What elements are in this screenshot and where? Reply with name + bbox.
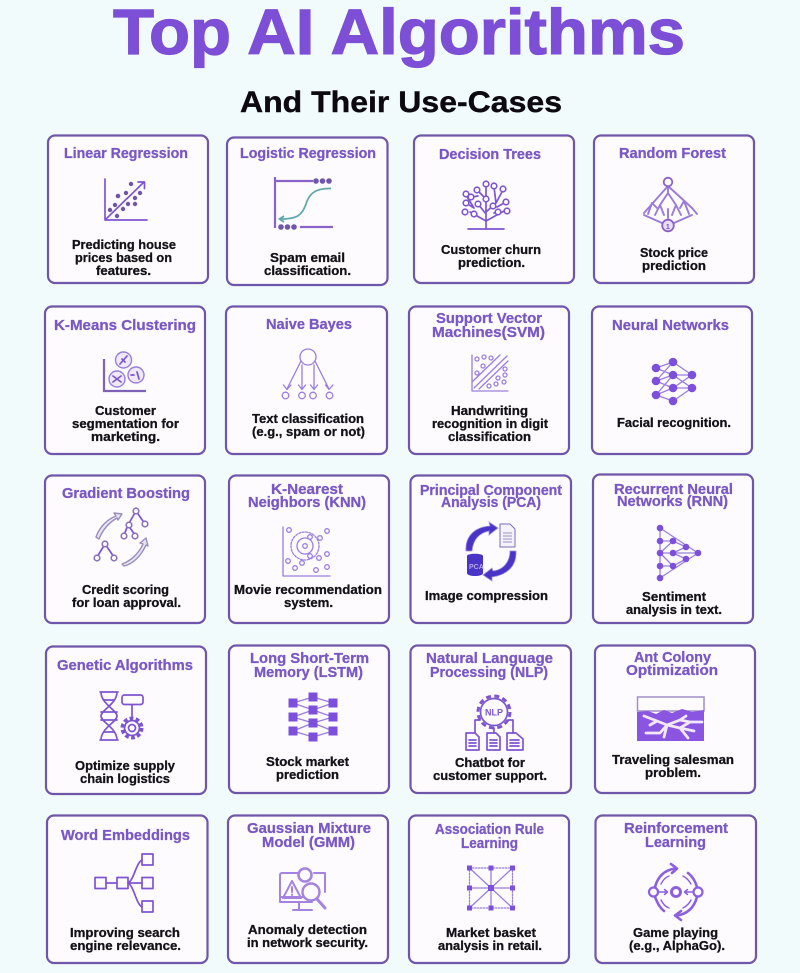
use case text: Optimize supply [75, 758, 176, 773]
use case text: segmentation for [72, 416, 179, 431]
panel: Decision Trees [414, 136, 574, 283]
panel: Naive Bayes [226, 306, 387, 454]
use case text: system. [284, 595, 333, 610]
use case text: in network security. [247, 935, 368, 950]
icon: PCA cycle with database and document [466, 522, 516, 581]
panel: Recurrent Neural Networks [593, 474, 753, 623]
use case text: Sentiment [642, 589, 707, 604]
icon: word embedding tree [95, 854, 153, 912]
use case text: (e.g., spam or not) [252, 424, 365, 439]
heading: Ant Colony Optimization: Ant Colony [634, 649, 712, 666]
icon: sigmoid curve [275, 177, 333, 230]
icon: recurrent neural network [657, 525, 701, 581]
heading: K-Nearest Neighbors (KNN): Neighbors (KNN) [248, 494, 366, 511]
use case text: Image compression [425, 588, 548, 603]
heading: Random Forest: Random Forest [619, 145, 726, 162]
heading: K-Nearest Neighbors (KNN) [248, 481, 366, 511]
use case text [640, 245, 708, 273]
heading: Support Vector Machines(SVM) [432, 310, 545, 341]
use case text [70, 925, 181, 953]
heading: Logistic Regression: Logistic Regression [240, 145, 376, 162]
use case text: Stock price [640, 245, 708, 260]
icon: NLP gear and documents [466, 696, 523, 750]
use case text [252, 411, 365, 439]
heading: Gaussian Mixture Model (GMM) [247, 820, 371, 851]
heading: Neural Networks: Neural Networks [612, 317, 729, 334]
use case text: Chatbot for [455, 755, 525, 770]
use case text [432, 403, 549, 444]
icon: boosting trees and arrows [94, 508, 148, 566]
use case text: engine relevance. [70, 938, 181, 953]
heading: Reinforcement Learning: Reinforcement [624, 820, 728, 837]
use case text: prediction [276, 767, 339, 782]
panel: Genetic Algorithms [46, 646, 206, 794]
icon: random forest [644, 178, 697, 231]
heading: Genetic Algorithms: Genetic Algorithms [57, 657, 193, 674]
use case text: (e.g., AlphaGo). [629, 938, 725, 953]
use case text [438, 925, 542, 953]
use case text: Customer [95, 403, 156, 418]
icon: ant colony tunnels [637, 697, 704, 741]
use case text [72, 403, 179, 444]
heading: Long Short-Term Memory (LSTM): Long Short-Term [250, 650, 369, 667]
use case text: prediction. [458, 255, 525, 270]
heading: Decision Trees: Decision Trees [439, 146, 541, 163]
icon: monitor with warning and magnifier [280, 868, 325, 910]
subtitle: And Their Use-Cases [240, 86, 562, 119]
use case text: problem. [645, 765, 701, 780]
panel: Logistic Regression [227, 138, 388, 285]
use case text: prices based on [75, 250, 172, 265]
heading: Support Vector Machines(SVM): Support Vector [436, 310, 542, 327]
use case text [75, 758, 176, 786]
icon: reinforcement cycle [649, 864, 702, 920]
icon: SVM scatter with separating hyperplane [472, 355, 508, 391]
use case text: Predicting house [72, 237, 176, 252]
icon: NLP gear and documents: NLP [485, 708, 503, 718]
heading: Recurrent Neural Networks (RNN): Networks (RNN) [617, 493, 728, 510]
use case text: recognition in digit [432, 416, 549, 431]
heading: Ant Colony Optimization: Optimization [626, 662, 718, 679]
heading: Long Short-Term Memory (LSTM) [250, 650, 369, 681]
panel: Reinforcement Learning [596, 816, 756, 963]
heading: K-Nearest Neighbors (KNN): K-Nearest [271, 481, 343, 498]
use case text: classification. [264, 263, 351, 278]
use case text: Spam email [270, 250, 345, 265]
panel: Principal Component Analysis [410, 476, 571, 623]
use case text [234, 582, 382, 610]
icon: decision tree [462, 181, 510, 229]
icon: random forest: 1 [666, 222, 670, 231]
use case text: Customer churn [441, 242, 541, 257]
use case text: Traveling salesman [612, 752, 734, 767]
use case text: classification [448, 429, 531, 444]
panel: Support Vector Machines [409, 306, 569, 454]
heading: Natural Language Processing (NLP) [426, 650, 553, 681]
use case text: Anomaly detection [248, 922, 367, 937]
use case text [626, 589, 722, 617]
icon: scatter plot with trend line [105, 179, 147, 220]
icon: DNA helix and gear [100, 692, 143, 740]
use case text: Game playing [633, 925, 718, 940]
use case text: Movie recommendation [234, 582, 382, 597]
use case text: Credit scoring [82, 582, 169, 597]
use case text [264, 250, 351, 278]
use case text [433, 755, 547, 783]
use case text: Market basket [446, 925, 537, 940]
use case text [441, 242, 541, 270]
heading: Association Rule Learning: Association Rule [435, 821, 544, 838]
use case text: Stock market [266, 754, 350, 769]
heading: Linear Regression: Linear Regression [64, 145, 188, 162]
use case text [612, 752, 734, 780]
use case text: Improving search [70, 925, 180, 940]
heading: Gaussian Mixture Model (GMM): Model (GMM) [262, 834, 355, 851]
panel: Gradient Boosting [45, 476, 205, 623]
heading: Recurrent Neural Networks (RNN): Recurrent Neural [614, 481, 733, 498]
use case text: marketing. [91, 429, 160, 444]
heading: Reinforcement Learning [624, 820, 728, 851]
icon: neural network [652, 358, 696, 405]
heading: Long Short-Term Memory (LSTM): Memory (LSTM) [254, 664, 363, 681]
heading: Word Embeddings: Word Embeddings [61, 827, 190, 844]
panel: Gaussian Mixture Model [228, 816, 388, 963]
heading: Recurrent Neural Networks (RNN) [614, 481, 733, 510]
panel: Ant Colony Optimization [595, 646, 755, 793]
heading: Gradient Boosting: Gradient Boosting [62, 485, 190, 502]
heading: Ant Colony Optimization [626, 649, 718, 679]
heading: Naive Bayes: Naive Bayes [266, 316, 352, 333]
heading: Support Vector Machines(SVM): Machines(SVM) [432, 324, 545, 341]
heading: Reinforcement Learning: Learning [645, 834, 706, 851]
use case text: analysis in text. [626, 602, 722, 617]
icon: association grid [467, 866, 515, 910]
panel: Long Short-Term Memory [229, 646, 389, 793]
icon: LSTM network of squares [288, 692, 338, 742]
icon: nearest neighbours plot [283, 527, 330, 576]
heading: Principal Component Analysis (PCA): Analysis (PCA) [441, 494, 541, 511]
use case text: customer support. [433, 768, 547, 783]
panel: Linear Regression [48, 136, 208, 283]
use case text [266, 754, 350, 782]
panel: Natural Language Processing [410, 646, 571, 793]
icon: PCA cycle with database and document: PCA [469, 564, 484, 571]
use case text: features. [96, 263, 151, 278]
icon: clusters [104, 352, 146, 391]
use case text: Handwriting [451, 403, 528, 418]
use case text: Text classification [252, 411, 364, 426]
use case text [72, 582, 181, 610]
use case text [72, 237, 176, 278]
heading: Gaussian Mixture Model (GMM): Gaussian Mixture [247, 820, 371, 837]
panel: K-Nearest Neighbors [229, 476, 389, 623]
use case text: for loan approval. [72, 595, 181, 610]
use case text: prediction [642, 258, 706, 273]
panel: K-Means Clustering [45, 306, 205, 454]
use case text [247, 922, 368, 950]
icon: probability tree with arrows [282, 349, 333, 399]
use case text [629, 925, 725, 953]
heading: Principal Component Analysis (PCA) [420, 482, 562, 511]
use case text: analysis in retail. [438, 938, 542, 953]
heading: K-Means Clustering: K-Means Clustering [54, 317, 196, 334]
heading: Natural Language Processing (NLP): Processing (NLP) [430, 664, 548, 681]
use case text: Facial recognition. [617, 415, 731, 430]
heading: Principal Component Analysis (PCA): Principal Component [420, 482, 562, 499]
panel: Neural Networks [592, 306, 752, 454]
heading: Natural Language Processing (NLP): Natural Language [426, 650, 553, 667]
heading: Association Rule Learning [435, 821, 544, 852]
heading: Association Rule Learning: Learning [461, 835, 518, 852]
panel: Association Rule Learning [409, 816, 569, 963]
use case text: chain logistics [80, 771, 170, 786]
panel: Random Forest [594, 136, 754, 283]
panel: Word Embeddings [47, 816, 208, 963]
